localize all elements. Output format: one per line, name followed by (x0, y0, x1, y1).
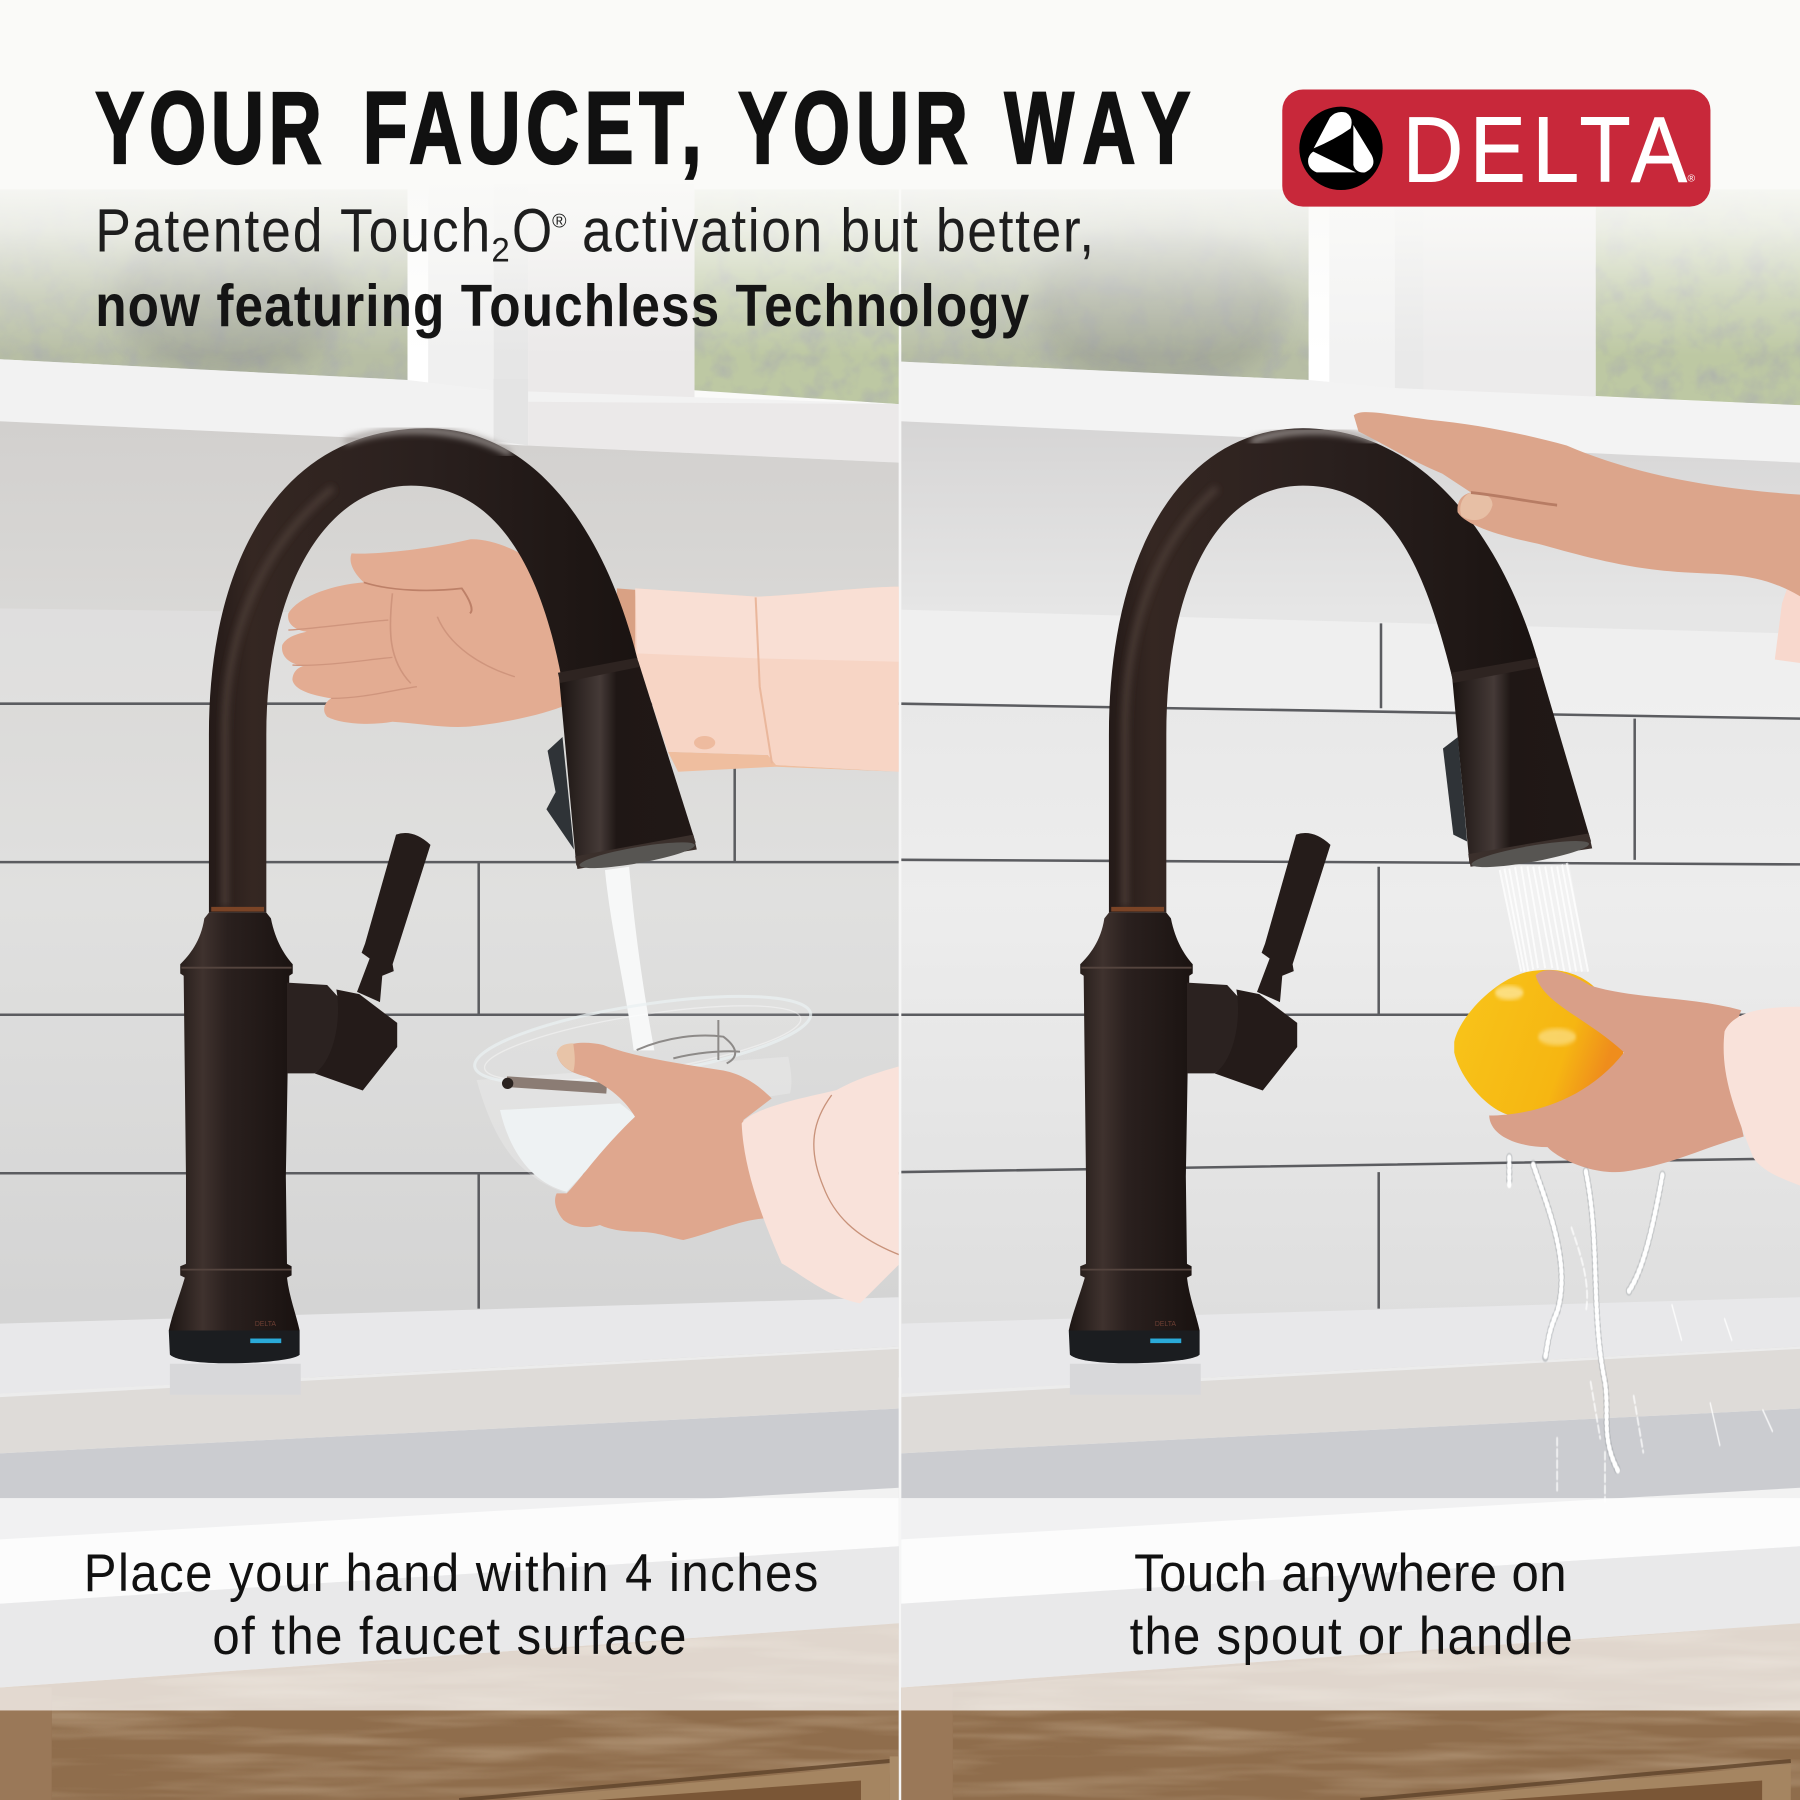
lower sleeve (742, 1066, 900, 1303)
window and trees (0, 184, 899, 463)
upper hand (282, 539, 637, 727)
panel: touch activation scene (901, 184, 1800, 1800)
faucet base: DELTA (1155, 1321, 1176, 1328)
title: WAY (1004, 70, 1190, 185)
logo registered mark: ® (1688, 173, 1696, 184)
water stream (605, 867, 654, 1050)
countertop (901, 1297, 1800, 1688)
faucet base (1069, 833, 1330, 1363)
subtitle line two: now featuring Touchless Technology (95, 272, 1029, 339)
caption: touch (1130, 1543, 1573, 1666)
kitchen wall (901, 421, 1800, 1378)
upper sleeve (635, 587, 899, 772)
lemon (1454, 970, 1624, 1115)
logo wordmark: DELTA (1403, 97, 1687, 201)
sink lip (901, 1488, 1800, 1604)
panel: touchless activation scene (0, 184, 900, 1800)
brand logo (1282, 90, 1710, 207)
tree foliage texture (30, 244, 1800, 405)
subtitle line one (95, 196, 1094, 270)
bottom caption band (0, 1498, 899, 1710)
glass bowl (473, 995, 812, 1192)
panel divider (899, 344, 901, 1800)
wood cabinet (901, 1619, 1800, 1800)
subtitle line one: 2 (491, 232, 510, 270)
top white fade (0, 0, 1800, 356)
subtitle line one: ® (552, 210, 567, 232)
upper hand touching spout (1354, 412, 1800, 663)
falling water droplets (1509, 1158, 1772, 1501)
subtitle line one: activation but better, (582, 197, 1094, 265)
logo icon (1299, 107, 1383, 190)
faucet spout (1109, 428, 1592, 913)
window and trees (901, 195, 1800, 406)
water spray (1500, 863, 1588, 972)
lower hand (555, 1043, 772, 1240)
caption: touch: Touch anywhere on (1134, 1543, 1567, 1602)
kitchen wall (0, 421, 899, 1378)
countertop (0, 1297, 899, 1688)
caption: touch: the spout or handle (1130, 1607, 1573, 1666)
lower hand holding lemon (1489, 970, 1744, 1172)
faucet base (169, 833, 430, 1363)
title (95, 70, 1190, 185)
caption: touchless (84, 1543, 818, 1666)
spray head (546, 658, 697, 873)
caption: touchless: Place your hand within 4 inches (84, 1543, 818, 1602)
subtitle line one: Patented Touch (95, 197, 490, 265)
title: FAUCET, (363, 70, 702, 185)
lower sleeve (1724, 1007, 1800, 1186)
title: YOUR (95, 70, 322, 185)
title: YOUR (738, 70, 968, 185)
faucet spout (209, 428, 697, 913)
caption: touchless: of the faucet surface (212, 1607, 686, 1666)
faucet base: DELTA (255, 1321, 276, 1328)
bottom caption band right (901, 1498, 1800, 1710)
sink lip (0, 1488, 899, 1604)
wood cabinet (0, 1619, 899, 1800)
spray head (1443, 658, 1592, 872)
subtitle line one: O (512, 196, 552, 264)
